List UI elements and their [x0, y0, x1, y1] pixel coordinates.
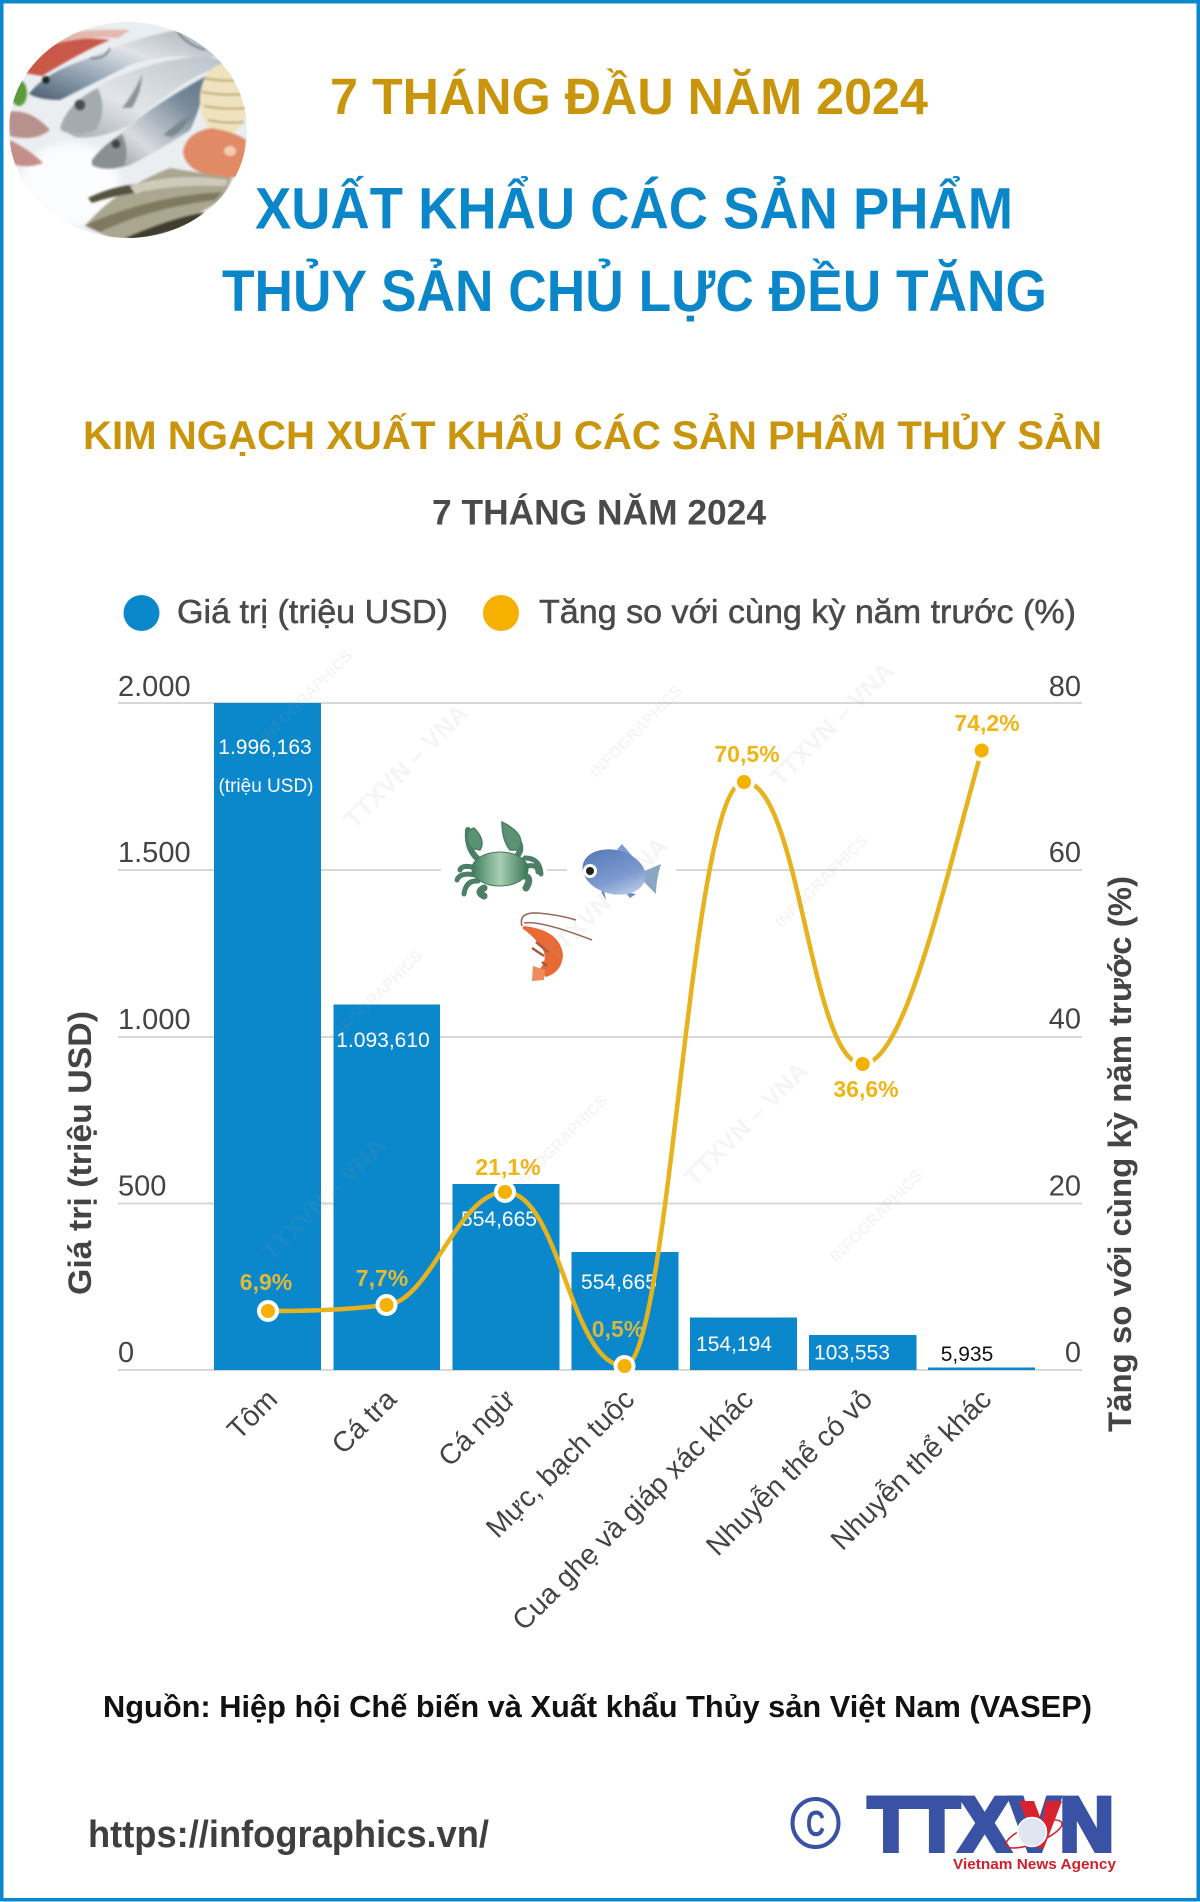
- trend value labels: 0,5%: [592, 1316, 644, 1342]
- category labels: [221, 1383, 998, 1637]
- watermarks: [257, 647, 926, 1267]
- title: period: 7 THÁNG ĐẦU NĂM 2024: [330, 67, 929, 125]
- category labels: Cá ngừ: [432, 1383, 522, 1473]
- pink fish heads: [8, 111, 50, 138]
- watermarks: TTXVN – VNA: [257, 1132, 392, 1267]
- category labels: Nhuyễn thể có vỏ: [700, 1383, 879, 1562]
- left axis ticks: 2.000: [118, 671, 191, 703]
- left axis ticks: 1.500: [118, 837, 191, 869]
- trend value labels: 70,5%: [714, 741, 780, 767]
- title: main headline: [222, 176, 1047, 324]
- left axis ticks: 0: [118, 1337, 134, 1369]
- green garnish: [11, 80, 27, 106]
- trend line: [268, 750, 982, 1366]
- left axis ticks: 1.000: [118, 1004, 191, 1036]
- grid lines: [118, 703, 1082, 1370]
- bar value labels: 554,665: [581, 1271, 657, 1294]
- logo: TTXVN Vietnam News Agency: TTXVN: [868, 1782, 1114, 1868]
- watermarks: INFOGRAPHICS: [772, 832, 871, 931]
- title: main headline: THỦY SẢN CHỦ LỰC ĐỀU TĂNG: [222, 259, 1047, 324]
- source: Nguồn: Hiệp hội Chế biến và Xuất khẩu Thủy sản Việt Nam (VASEP): [103, 1689, 1092, 1724]
- red fish: [19, 38, 110, 76]
- fish one: [29, 29, 225, 100]
- category labels: Cá tra: [326, 1383, 403, 1461]
- bar value labels: 1.996,163: [218, 736, 312, 759]
- icon: blue fish: [578, 843, 661, 901]
- legend: Giá trị (triệu USD): [177, 593, 448, 630]
- logo: TTXVN Vietnam News Agency: Vietnam News Agency: [953, 1856, 1117, 1873]
- watermarks: INFOGRAPHICS: [257, 647, 356, 746]
- right axis ticks: [1049, 671, 1081, 1369]
- icons mask and seafood icons: [441, 822, 676, 981]
- right axis title: Tăng so với cùng kỳ năm trước (%): [1102, 876, 1138, 1432]
- trend value labels: 6,9%: [240, 1269, 292, 1295]
- bar value labels: 1.093,610: [336, 1029, 430, 1052]
- bar value labels: 103,553: [814, 1342, 890, 1364]
- chart heading: KIM NGẠCH XUẤT KHẨU CÁC SẢN PHẨM THỦY SẢN: [83, 411, 1102, 458]
- shrimp: [85, 168, 232, 240]
- fish two: [60, 57, 234, 138]
- website url: https://infographics.vn/: [88, 1814, 489, 1856]
- trend value labels: 7,7%: [356, 1265, 408, 1291]
- logo: copyright symbol: [792, 1799, 838, 1847]
- category labels: Tôm: [221, 1383, 284, 1446]
- legend: [124, 593, 1076, 631]
- left axis ticks: [118, 671, 191, 1369]
- watermarks: TTXVN – VNA: [765, 657, 900, 792]
- watermarks: INFOGRAPHICS: [827, 1167, 926, 1266]
- icon: crab: [457, 822, 541, 896]
- salmon: [183, 128, 246, 178]
- watermarks: TTXVN – VNA: [339, 699, 474, 834]
- bar value labels: 554,665: [461, 1208, 537, 1231]
- chart subheading: 7 THÁNG NĂM 2024: [432, 492, 767, 532]
- bar value labels: 5,935: [941, 1343, 993, 1366]
- trend markers: [259, 742, 991, 1375]
- logo: copyright symbol: C: [806, 1803, 825, 1844]
- trend value labels: 21,1%: [475, 1154, 541, 1180]
- fish three: [118, 76, 206, 168]
- category labels: Mực, bạch tuộc: [480, 1383, 641, 1544]
- right axis ticks: 40: [1049, 1004, 1081, 1036]
- watermarks: TTXVN – VNA: [679, 1057, 814, 1192]
- trend value labels: [240, 710, 1020, 1342]
- icon: shrimp: [521, 913, 592, 981]
- bar value labels: [218, 736, 993, 1366]
- bars: [214, 703, 1035, 1370]
- bar value labels: 154,194: [696, 1333, 772, 1356]
- legend: Tăng so với cùng kỳ năm trước (%): [539, 593, 1076, 630]
- right axis ticks: 60: [1049, 837, 1081, 869]
- watermarks: INFOGRAPHICS: [327, 947, 426, 1046]
- photo: seafood on ice: [8, 22, 248, 242]
- scallop shell: [200, 64, 248, 136]
- trend value labels: 74,2%: [954, 710, 1020, 736]
- left axis title: Giá trị (triệu USD): [62, 1011, 98, 1295]
- right axis ticks: 0: [1065, 1337, 1081, 1369]
- right axis ticks: 20: [1049, 1170, 1081, 1202]
- trend value labels: 36,6%: [833, 1076, 899, 1102]
- category labels: Nhuyễn thể khác: [825, 1383, 998, 1557]
- chart: combined bars and line: [62, 647, 1138, 1637]
- watermarks: TTXVN – VNA: [539, 832, 674, 967]
- watermarks: INFOGRAPHICS: [512, 1092, 611, 1191]
- title: main headline: XUẤT KHẨU CÁC SẢN PHẨM: [255, 176, 1013, 242]
- category labels: Cua ghẹ và giáp xác khác: [506, 1383, 760, 1637]
- left axis ticks: 500: [118, 1170, 166, 1202]
- watermarks: INFOGRAPHICS: [587, 682, 686, 781]
- bar value labels: (triệu USD): [218, 776, 314, 797]
- right axis ticks: 80: [1049, 671, 1081, 703]
